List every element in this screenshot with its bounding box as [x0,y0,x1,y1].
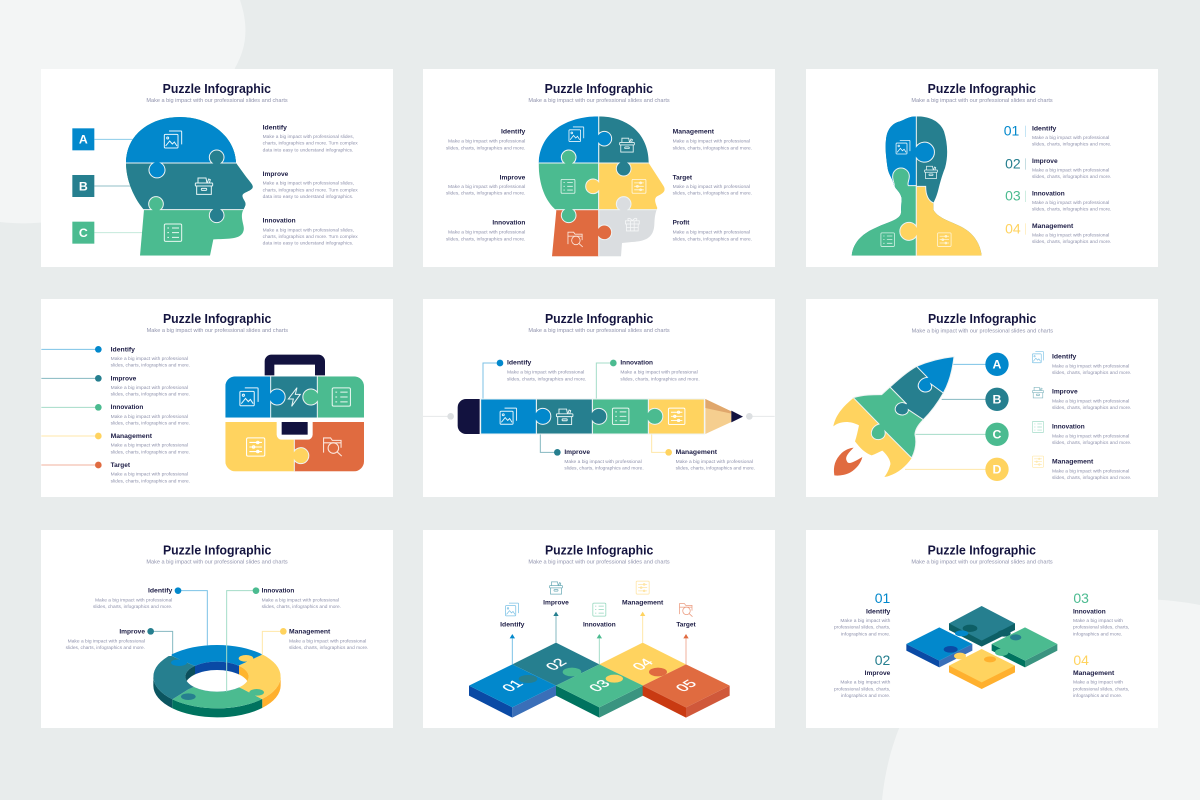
text: Improve: Make a big impact with professional [564,459,642,464]
pencil tip [731,411,743,422]
text: Innovation: Innovation [263,218,296,225]
panel: rocket puzzle [806,299,1158,497]
text: Management: Management [1052,458,1094,465]
text: Improve: Improve [119,628,145,635]
text: Identify: slides, charts, infographics and more. [1032,142,1111,147]
text: Innovation: Innovation [111,404,143,411]
background blob: bottom right [882,599,1200,800]
text: Innovation: Innovation [262,587,294,594]
text: Target [111,462,190,483]
icon: search [568,232,583,247]
teal piece [949,606,1015,647]
connector: Target [41,462,102,468]
text: Identify [93,587,173,609]
text: Target: Make a big impact with professional [673,184,750,189]
pencil body [481,399,704,434]
text: Innovation [620,360,700,381]
text: Innovation: Make a big impact with professional [1032,200,1109,205]
text: Management: Make a big impact with professional [111,443,188,448]
icon: bolt [288,388,300,406]
text: Identify: slides, charts, infographics and more. [507,376,586,381]
badge B: B [79,179,88,193]
text: Innovation: Make a big impact with professional [448,230,525,235]
text: Management [111,433,190,454]
ring side wall [153,677,281,717]
icon: sliders [632,179,646,193]
text: Identify: Identify [1032,125,1057,132]
briefcase bottom half [225,422,364,472]
text: 01 Identify [834,590,891,636]
tile 04 [599,643,686,686]
background blob: top left [0,0,245,223]
label: Target: Target [676,621,697,628]
text: Identify: Identify [263,124,288,131]
badge A [985,353,1009,376]
text: Improve: charts, infographics and more. Turn complex [263,187,358,192]
icon: list [1032,421,1044,433]
panel: bust with four puzzle pieces [806,69,1158,268]
text: Innovation [1025,190,1111,212]
text: Identify [507,360,586,381]
panel: isometric puzzle tiles [423,530,775,728]
connector: Improve [147,628,173,656]
icon: box [549,582,562,594]
text: Innovation: slides, charts, infographics and more. [1032,207,1111,212]
number 02: 02 [1005,155,1021,171]
text: Improve: slides, charts, infographics and more. [564,466,644,471]
ring inner wall and hole [185,662,249,692]
badge A: A [993,358,1002,372]
text: 02 Improve: 02 [875,652,891,668]
text: 02 Improve: infographics and more. [841,693,890,698]
tile 02 [512,643,599,686]
connector lines [94,139,145,233]
text: Management: slides, charts, infographics and more. [289,645,368,650]
text: Identify: Make a big impact with professional [95,597,172,602]
text: Identify: Make a big impact with professional slides, [263,134,354,139]
badge B [72,175,94,197]
text: Improve: Make a big impact with professional slides, [263,181,354,186]
puzzle head [126,117,253,256]
text: 04 Management: infographics and more. [1073,693,1122,698]
icon: box [924,166,937,178]
title: Puzzle Infographic [928,81,1036,96]
text: Improve: Improve [263,171,289,178]
text: Management: slides, charts, infographics and more. [676,466,755,471]
text: Innovation: charts, infographics and more. Turn complex [263,234,358,239]
text: Target [673,174,752,196]
connector: Identify [483,360,503,399]
arrow: Identify [510,634,515,664]
panel: pencil puzzle [423,299,775,497]
text: Identify: slides, charts, infographics and more. [1052,370,1131,375]
text: 03 Innovation: Make a big impact with [1073,618,1123,623]
connector: Innovation [227,587,259,692]
text: Management [673,129,752,150]
text: Identify: Make a big impact with professional [507,370,584,375]
badge C [985,423,1009,446]
text: Innovation: Innovation [620,360,653,367]
text: Profit: Profit [673,220,690,227]
text: Identify [1025,125,1111,147]
text: Management: Management [676,449,718,456]
rocket flame [834,448,862,476]
text: Improve [1025,158,1111,179]
label: Management: Management [622,600,664,607]
pencil wood [705,399,731,434]
tile 01 [469,664,556,718]
rocket yellow piece [833,398,912,477]
connector: Innovation [596,360,617,399]
number 03: 03 [1005,188,1021,204]
icon: box [1032,387,1044,398]
text: Identify: Make a big impact with professional [111,356,188,361]
icon: list [164,224,182,241]
text: Improve: Improve [564,449,590,456]
text: Improve: Make a big impact with professional [68,638,145,643]
pencil cap [458,399,480,434]
connector: Improve [540,434,561,456]
arrow: Innovation [597,634,602,664]
title: Puzzle Infographic [163,311,271,326]
panel: briefcase puzzle [41,299,393,497]
text: Improve: Improve [500,174,526,181]
text: Identify: Make a big impact with professional [448,139,525,144]
text: Profit [673,220,752,241]
text: Innovation: Innovation [1032,190,1065,197]
arrow: Management [640,612,645,643]
title: Puzzle Infographic [928,542,1036,557]
rocket green piece [853,387,923,458]
text: Innovation: slides, charts, infographics and more. [262,604,341,609]
subtitle: Make a big impact with our professional slides and charts [528,559,670,565]
connector: Management [41,433,102,439]
text: Management: Management [1032,223,1074,230]
icon: list [881,233,894,246]
label: Innovation: Innovation [583,621,616,628]
connector: Management [652,434,672,456]
text: Identify: slides, charts, infographics and more. [93,604,172,609]
label: Identify: Identify [500,621,525,628]
icon: search [324,438,342,456]
text: 01 Identify: infographics and more. [841,631,890,636]
subtitle: Make a big impact with our professional slides and charts [912,328,1053,334]
puzzle bust [852,116,982,256]
subtitle: Make a big impact with our professional slides and charts [528,98,670,104]
text: Improve: Improve [111,375,137,382]
text: Identify [263,124,358,152]
icon: image [1032,352,1044,363]
number 04: 04 [1005,220,1021,236]
text: Improve: Make a big impact with professional [448,184,525,189]
text: 01 Identify: 01 [875,590,891,606]
text: Identify: Identify [501,129,526,136]
text: 01 Identify: Identify [866,608,891,615]
blue piece [906,627,972,667]
icon: sliders [636,581,649,594]
text: Target: Target [111,462,131,469]
icon: sliders [1032,456,1044,467]
badge C [72,222,94,244]
text: Identify: charts, infographics and more. Turn complex [263,141,358,146]
right axis [746,413,775,420]
text: 04 Management: 04 [1073,652,1089,668]
label: Improve: Improve [543,600,569,607]
tile 03 [556,664,643,718]
text: Improve: Make a big impact with professional [1052,398,1129,403]
text: Management: slides, charts, infographics and more. [1032,239,1111,244]
text: 02 Improve: Improve [865,670,891,677]
left axis [423,413,454,420]
subtitle: Make a big impact with our professional slides and charts [146,559,288,565]
text: Target: slides, charts, infographics and more. [673,191,752,196]
badge B [985,388,1009,411]
text: 03 Innovation [1073,590,1129,636]
text: Management: slides, charts, infographics and more. [1052,475,1131,480]
number 02: 02 [543,657,571,673]
icon: image [569,127,584,141]
text: Improve: Make a big impact with professional [1032,167,1109,172]
text: 03 Innovation: infographics and more. [1073,631,1122,636]
number 03: 03 [586,678,614,694]
text: Innovation [446,220,525,241]
text: Innovation [111,404,190,426]
text: Identify: data into easy to understand infographics. [263,147,353,152]
text: Identify [111,346,190,368]
text: Identify [446,129,526,150]
badge D: D [993,463,1002,477]
text: Identify: slides, charts, infographics and more. [446,145,525,150]
text: Improve [263,171,358,199]
text: Innovation: Make a big impact with professional [111,414,188,419]
text: Improve: slides, charts, infographics and more. [1032,174,1111,179]
connector: Identify [41,346,102,353]
text: 01 Identify: Make a big impact with [840,618,891,623]
green piece [992,627,1057,667]
icon: sliders [668,408,685,425]
title: Puzzle Infographic [545,311,653,326]
text: Innovation [1052,423,1131,445]
icon: image [500,408,517,424]
connector: Innovation [41,404,102,411]
text: 03 Innovation: professional slides, charts, [1073,625,1129,630]
text: 03 Innovation: 03 [1073,590,1089,606]
text: Management [289,628,368,650]
text: Improve: Improve [1052,388,1078,395]
text: 02 Improve: Make a big impact with [840,680,891,685]
text: Target: Make a big impact with professional [111,472,188,477]
subtitle: Make a big impact with our professional slides and charts [911,98,1053,104]
text: Innovation: slides, charts, infographics and more. [111,421,190,426]
text: Innovation: slides, charts, infographics and more. [446,236,525,241]
panel: 3D puzzle ring [41,530,393,728]
text: 04 Management: professional slides, charts, [1073,686,1129,691]
text: Improve [1052,388,1131,410]
badge C: C [993,428,1002,442]
title: Puzzle Infographic [545,542,653,557]
icon: sliders [938,233,951,246]
text: Management: slides, charts, infographics and more. [673,145,752,150]
connector lines [905,364,997,469]
icon: image [896,140,910,154]
text: Improve [446,174,526,196]
text: Improve: slides, charts, infographics and more. [111,392,190,397]
icon: image [505,603,518,616]
number 05: 05 [673,678,701,694]
icon: list [561,179,575,193]
text: Improve: slides, charts, infographics and more. [66,645,145,650]
subtitle: Make a big impact with our professional slides and charts [147,328,288,334]
icon: search [679,604,692,617]
text: Management [1052,458,1131,480]
text: Identify: Identify [148,587,173,594]
text: Innovation [263,218,358,246]
text: Management: Management [289,628,331,635]
text: 02 Improve [834,652,891,698]
text: Management: Make a big impact with professional [1032,232,1109,237]
arrow: Target [683,634,689,664]
title: Puzzle Infographic [545,81,653,96]
text: Innovation: Innovation [1052,423,1085,430]
briefcase clasp [282,422,308,435]
icon: box [620,138,634,152]
icon: box [556,409,573,425]
text: Innovation: Make a big impact with professional slides, [263,227,354,232]
text: Improve [111,375,190,397]
text: 04 Management [1073,652,1129,698]
rocket teal piece [890,366,943,420]
number 04: 04 [630,657,658,673]
connector: Improve [41,375,102,382]
text: 02 Improve: professional slides, charts, [834,686,890,691]
text: Innovation [262,587,341,609]
text: Innovation: data into easy to understand infographics. [263,241,353,246]
tile 05 [643,664,730,718]
yellow piece [949,649,1015,689]
badge A [72,128,94,150]
icon: box [195,178,213,194]
icon: sliders [247,438,265,456]
badge C: C [79,226,88,240]
text: Identify [1052,353,1131,375]
icon: list [612,408,629,425]
subtitle: Make a big impact with our professional slides and charts [528,328,670,334]
text: 03 Innovation: Innovation [1073,608,1106,615]
icon: image [164,131,182,148]
number 01: 01 [1004,123,1020,139]
arrow: Improve [553,612,559,643]
badge B: B [993,393,1002,407]
text: Identify: Identify [507,360,532,367]
text: Management: Make a big impact with professional [673,139,750,144]
puzzle head [538,116,665,256]
text: Profit: slides, charts, infographics and more. [673,236,752,241]
text: Improve: Make a big impact with professional [111,385,188,390]
icon: list [332,388,350,406]
briefcase handle [265,355,325,375]
text: Management: Make a big impact with professional [289,638,366,643]
briefcase top half [225,376,364,418]
text: Identify: Make a big impact with professional [1052,363,1129,368]
text: Innovation: slides, charts, infographics and more. [1052,440,1131,445]
text: Improve [564,449,644,471]
ring top surface [153,645,281,708]
connector: Management [262,628,287,656]
badge A: A [79,133,88,147]
number 01: 01 [499,678,527,694]
text: Management: Make a big impact with professional [676,459,753,464]
text: 01 Identify: professional slides, charts, [834,625,890,630]
connector: Identify [175,587,207,645]
text: Innovation: Make a big impact with professional [620,370,698,375]
icon: image [240,388,258,406]
text: 04 Management: Make a big impact with [1073,680,1123,685]
title: Puzzle Infographic [928,311,1036,326]
text: Identify: Make a big impact with professional [1032,135,1109,140]
text: Management [676,449,755,471]
icon: gift [625,218,639,231]
title: Puzzle Infographic [163,81,271,96]
text: Management: slides, charts, infographics and more. [111,449,190,454]
text: Improve [66,628,145,650]
text: Target: slides, charts, infographics and more. [111,478,190,483]
text: Improve: data into easy to understand infographics. [263,194,353,199]
text: Profit: Make a big impact with professional [673,230,750,235]
text: Improve: Improve [1032,158,1058,165]
text: 04 Management: Management [1073,670,1115,677]
text: Innovation: slides, charts, infographics and more. [620,376,700,381]
text: Management: Management [673,129,715,136]
icon: list [593,603,606,616]
text: Identify: Identify [1052,353,1077,360]
text: Identify: slides, charts, infographics and more. [111,363,190,368]
title: Puzzle Infographic [163,542,271,557]
text: Innovation: Make a big impact with professional [1052,433,1129,438]
text: Improve: slides, charts, infographics and more. [446,191,525,196]
badge D [985,458,1009,481]
panel: isometric four pieces [806,530,1158,728]
panel: head with six puzzle pieces [423,69,775,268]
panel: head with three puzzle layers [41,69,393,268]
text: Management: Make a big impact with professional [1052,468,1129,473]
subtitle: Make a big impact with our professional slides and charts [911,559,1053,565]
text: Management: Management [111,433,153,440]
rocket blue nose [917,357,954,393]
text: Innovation: Innovation [492,220,525,227]
subtitle: Make a big impact with our professional slides and charts [146,98,288,104]
text: Innovation: Make a big impact with professional [262,597,339,602]
text: Improve: slides, charts, infographics and more. [1052,405,1131,410]
text: Identify: Identify [111,346,136,353]
text: Target: Target [673,174,693,181]
text: Management [1025,223,1111,244]
